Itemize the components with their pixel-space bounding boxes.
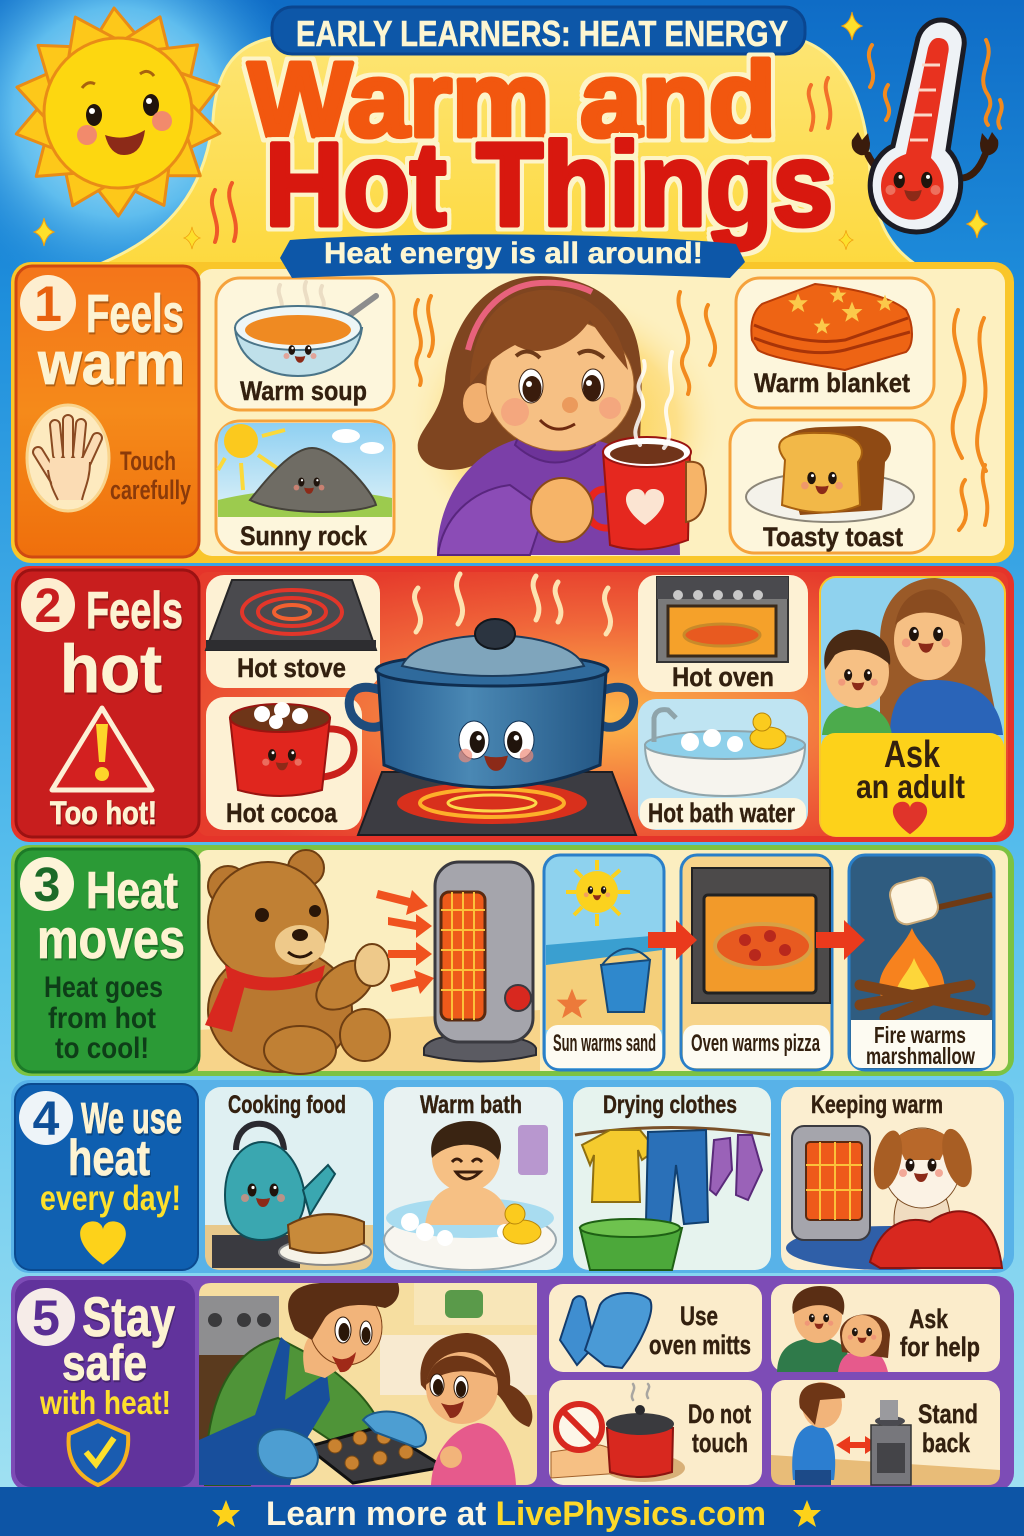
card: hot stove	[206, 575, 380, 688]
icon: smiling sun	[11, 6, 225, 218]
left tab: stay safe: safe	[62, 1335, 147, 1391]
footer text: Learn more at LivePhysics.com	[266, 1495, 766, 1533]
left tab: feels warm: carefully	[110, 475, 191, 505]
card: drying clothes	[573, 1087, 771, 1270]
icon: hand	[27, 405, 109, 511]
card: cooking food	[205, 1087, 373, 1270]
arrow: sun to oven	[648, 920, 697, 960]
card: keeping warm: Keeping warm	[811, 1091, 943, 1119]
card: stand back: back	[922, 1428, 971, 1458]
left tab: stay safe	[15, 1280, 195, 1487]
card: ask an adult: an adult	[856, 768, 965, 805]
left tab: feels warm: Feels	[86, 284, 184, 344]
top pill heading: EARLY LEARNERS: HEAT ENERGY	[296, 13, 788, 54]
illustration: stove burner	[358, 772, 636, 835]
icon: thermometer character	[852, 20, 998, 232]
left tab: feels hot: Too hot!	[50, 795, 157, 831]
left tab: feels warm	[16, 266, 199, 557]
left tab: we use heat: 4	[33, 1093, 60, 1146]
heat squiggles around title	[212, 40, 1002, 242]
left tab: heat moves: from hot	[48, 1002, 156, 1035]
left tab: we use heat: We use	[81, 1094, 182, 1143]
left tab: we use heat: every day!	[40, 1179, 181, 1218]
heat squiggles panel 1	[415, 292, 987, 530]
card: do not touch	[549, 1380, 762, 1485]
illustration: heater	[424, 862, 536, 1062]
card: ask for help: for help	[900, 1332, 980, 1362]
card: stand back	[771, 1380, 1000, 1485]
card: sun warms sand: Sun warms sand	[553, 1030, 656, 1057]
card: hot cocoa	[206, 697, 362, 830]
left tab: we use heat	[15, 1084, 198, 1270]
left tab: stay safe: Stay	[82, 1285, 175, 1348]
left tab: feels hot	[16, 570, 199, 837]
card: warm blanket	[736, 278, 934, 408]
left tab: heat moves: Heat goes	[44, 971, 163, 1004]
left tab: heat moves	[16, 849, 199, 1072]
card: ask for help	[771, 1284, 1000, 1372]
card: stand back: Stand	[918, 1399, 978, 1429]
left tab: heat moves: to cool!	[55, 1032, 149, 1065]
heat squiggles above pot	[415, 574, 611, 634]
card: do not touch: touch	[692, 1428, 748, 1458]
card: hot stove: Hot stove	[237, 653, 346, 683]
card: ask an adult: Ask	[884, 734, 941, 776]
footer	[0, 1487, 1024, 1536]
left tab: heat moves: Heat	[86, 862, 178, 920]
card: drying clothes: Drying clothes	[603, 1091, 737, 1119]
card: sunny rock	[216, 421, 394, 553]
card: use oven mitts: oven mitts	[649, 1330, 751, 1360]
card: keeping warm	[781, 1087, 1004, 1270]
icon: shield	[69, 1421, 128, 1485]
card: use oven mitts	[549, 1284, 762, 1372]
left tab: heat moves: moves	[37, 907, 185, 970]
ribbon: heat energy is all around: Heat energy is all around!	[324, 237, 703, 270]
decorative sparkles	[34, 12, 987, 250]
card: hot oven: Hot oven	[672, 662, 774, 692]
card: warm soup: Warm soup	[240, 376, 367, 406]
icon: footer star right	[793, 1500, 821, 1527]
card: hot cocoa: Hot cocoa	[226, 798, 338, 828]
left tab: stay safe: 5	[32, 1290, 60, 1346]
panel: we use heat every day	[11, 1080, 1014, 1273]
illustration: dad and girl baking	[199, 1283, 537, 1485]
left tab: feels warm: Touch	[120, 446, 176, 476]
icon: footer star left	[212, 1500, 240, 1527]
card: sun warms sand	[544, 855, 664, 1070]
arrows: heat from heater	[376, 890, 434, 994]
card: fire warms marshmallow	[849, 855, 994, 1070]
icon: warning triangle	[52, 708, 152, 790]
card: hot bath water: Hot bath water	[648, 798, 795, 828]
arrow: oven to fire	[816, 920, 865, 960]
card: warm bath: Warm bath	[420, 1091, 522, 1119]
card: ask an adult	[820, 577, 1005, 836]
illustration: smiling blue pot	[349, 619, 634, 788]
card: toasty toast: Toasty toast	[763, 522, 903, 552]
left tab: feels warm: warm	[37, 330, 185, 397]
panel: feels hot	[11, 566, 1014, 842]
card: warm blanket: Warm blanket	[754, 368, 910, 398]
left tab: feels warm: 1	[34, 276, 62, 332]
left tab: we use heat: heat	[68, 1130, 150, 1186]
panel: stay safe with heat	[11, 1276, 1014, 1491]
card: do not touch: Do not	[688, 1399, 751, 1429]
left tab: feels hot: Feels	[86, 582, 183, 640]
title banner background	[100, 36, 915, 264]
card: hot bath water	[638, 699, 808, 830]
card: use oven mitts: Use	[680, 1301, 718, 1331]
left tab: feels hot: hot	[60, 631, 162, 707]
card: fire warms marshmallow: marshmallow	[866, 1043, 975, 1069]
main title: Warm and	[248, 41, 776, 159]
card: oven warms pizza	[681, 855, 832, 1070]
illustration: teddy bear	[205, 850, 390, 1074]
main title: Hot Things	[265, 119, 833, 251]
card: warm bath	[384, 1087, 563, 1270]
left tab: heat moves: 3	[34, 859, 60, 912]
card: cooking food: Cooking food	[228, 1091, 346, 1119]
ribbon: heat energy is all around	[280, 234, 745, 278]
left tab: stay safe: with heat!	[39, 1384, 171, 1421]
panel: feels warm	[11, 262, 1014, 563]
card: warm soup	[216, 278, 394, 410]
panel: heat moves	[11, 845, 1014, 1076]
main title	[248, 41, 833, 251]
card: fire warms marshmallow: Fire warms	[874, 1022, 966, 1048]
left tab: feels hot: 2	[35, 580, 61, 633]
card: sunny rock: Sunny rock	[240, 521, 368, 551]
card: hot oven	[638, 575, 808, 692]
character: girl with mug	[405, 276, 725, 560]
card: oven warms pizza: Oven warms pizza	[691, 1030, 820, 1057]
card: ask for help: Ask	[909, 1304, 949, 1334]
card: toasty toast	[730, 420, 934, 553]
